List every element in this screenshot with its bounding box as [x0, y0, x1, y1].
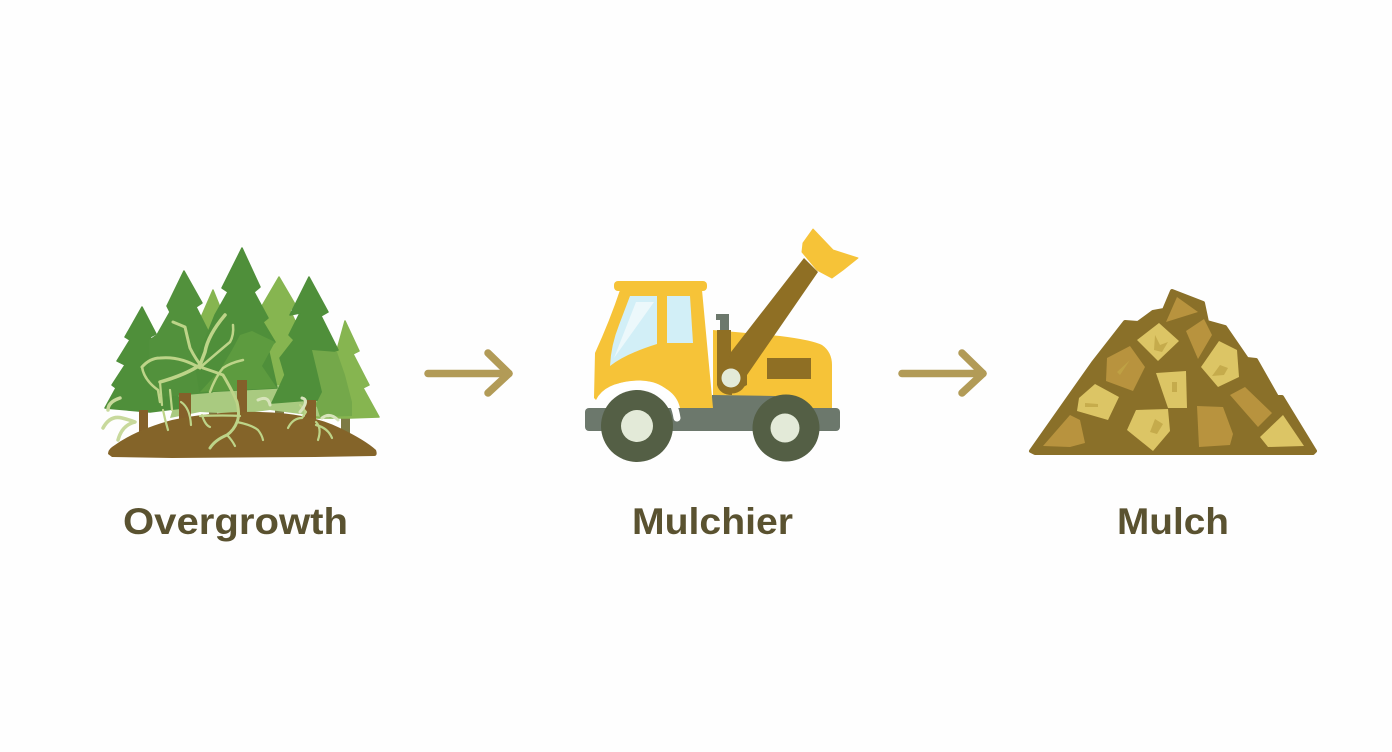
tree: centre tall	[195, 248, 277, 392]
pile base	[1031, 291, 1315, 453]
engine body	[713, 330, 832, 408]
side window	[667, 296, 693, 343]
chips light	[1077, 323, 1304, 451]
light trunks	[209, 398, 350, 434]
arm pivot	[718, 364, 746, 394]
icon: mulch pile	[1031, 291, 1315, 453]
chip shading	[1085, 335, 1228, 434]
tangled vines and roots	[103, 315, 338, 448]
tree: second dark	[150, 271, 222, 396]
chassis	[585, 395, 840, 431]
back light trees	[190, 277, 318, 385]
wheel arch	[603, 384, 677, 418]
tree: right dark	[272, 277, 350, 403]
ground mound	[108, 412, 377, 458]
mid light overlay tree	[312, 350, 352, 417]
tree: far right light	[312, 321, 379, 418]
label: Mulchier: Mulchier	[632, 501, 793, 542]
trunks	[139, 380, 316, 432]
cab roof	[614, 281, 707, 291]
cab body	[594, 290, 713, 408]
label: Overgrowth: Overgrowth	[123, 501, 348, 542]
tree: far left dark	[105, 307, 182, 412]
icon: mulcher truck	[585, 229, 858, 462]
lower undergrowth band	[170, 385, 330, 418]
engine vent	[767, 358, 811, 379]
boom arm	[722, 258, 818, 393]
exhaust pipe	[716, 314, 729, 330]
icon: overgrown forest	[103, 248, 379, 458]
arrow: overgrowth to mulchier	[428, 353, 509, 393]
label: Mulch: Mulch	[1117, 501, 1229, 542]
front windshield	[610, 296, 657, 366]
rear wheel	[752, 394, 820, 462]
front wheel	[601, 390, 673, 462]
windshield glare	[614, 302, 654, 358]
arm bracket	[717, 330, 732, 395]
centre lighter tree layer	[200, 331, 277, 392]
arrow: mulchier to mulch	[902, 353, 983, 393]
bucket	[802, 229, 858, 278]
chips tan	[1043, 297, 1272, 447]
